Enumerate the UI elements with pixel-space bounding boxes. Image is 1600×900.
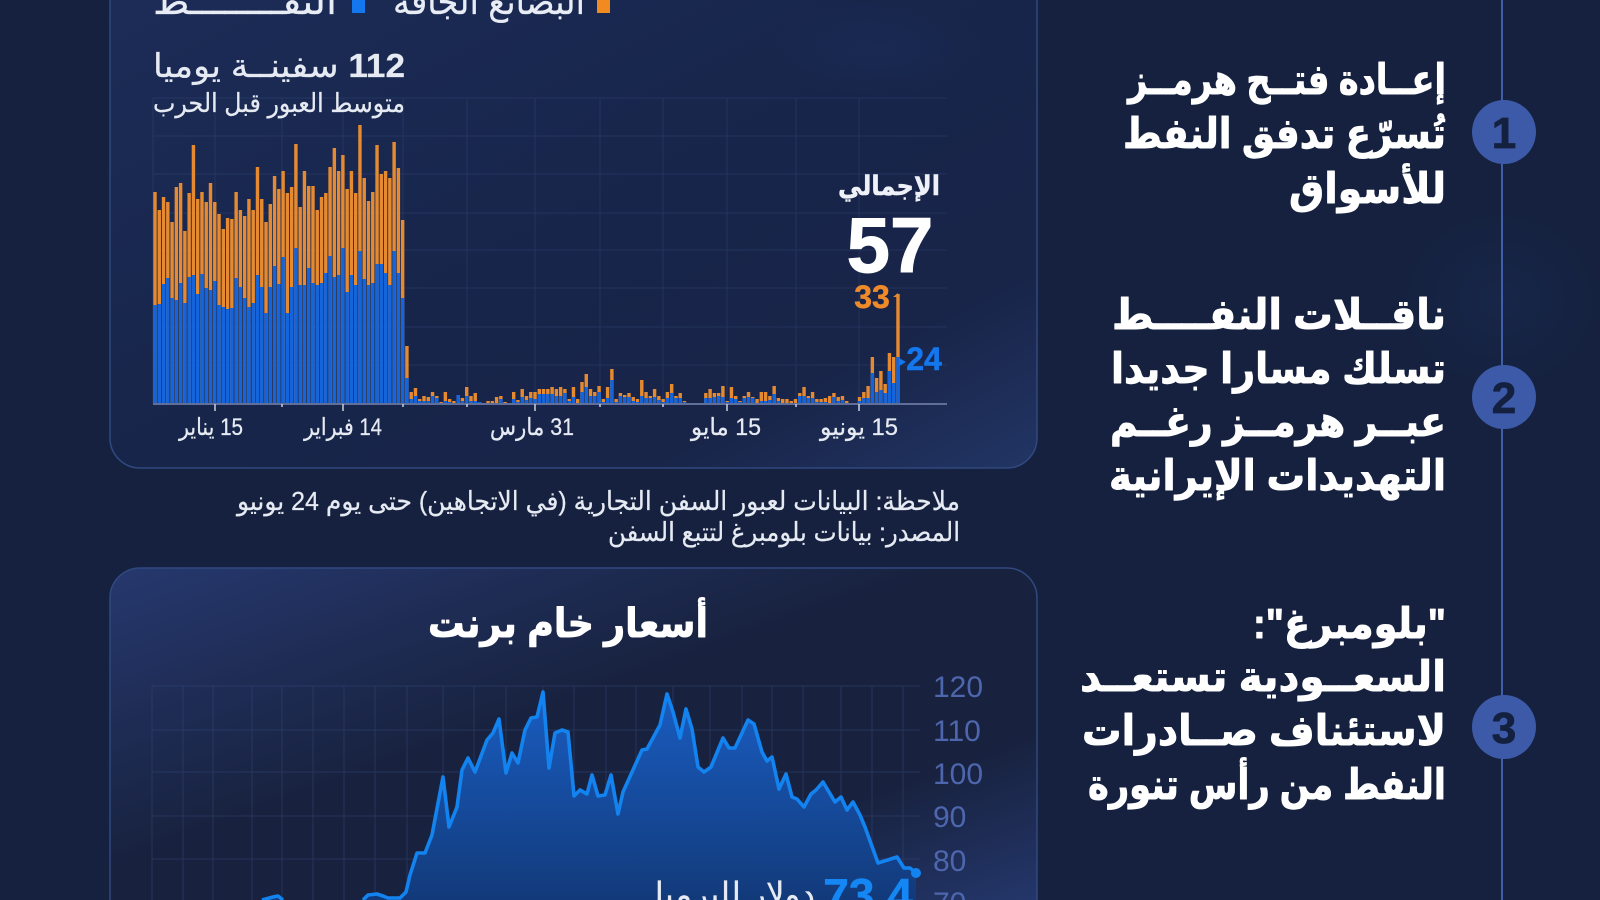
x-axis date labels: 15 يونيو — [819, 414, 898, 441]
pre-war average label: متوسط العبور قبل الحرب — [153, 88, 405, 119]
marker: blue arrow — [899, 358, 906, 366]
area chart: Brent price — [262, 692, 921, 900]
legend swatch: orange — [597, 0, 610, 13]
note and source — [235, 486, 960, 548]
headline 2: ناقــلات النفــــط — [1112, 291, 1446, 338]
headline 3: لاستئناف صــادرات — [1082, 707, 1446, 755]
total callout: 33 — [854, 279, 890, 315]
x-axis date labels: 14 فبراير — [303, 414, 382, 441]
number badge 1 — [1472, 100, 1536, 164]
x-axis date labels: 31 مارس — [490, 414, 574, 441]
headline 2 — [1109, 291, 1536, 501]
panel: ship transits chart — [110, 0, 1037, 468]
note and source: ملاحظة: البيانات لعبور السفن التجارية (في الاتجاهين) حتى يوم 24 يونيو — [235, 486, 960, 517]
y-axis scale: 120 — [933, 671, 983, 704]
legend swatch: blue — [352, 0, 365, 13]
stacked bar chart: daily transits — [153, 125, 947, 411]
pre-war average label: 112 سفينــة يوميا — [153, 47, 405, 85]
marker: orange tick — [893, 293, 898, 297]
y-axis scale: 80 — [933, 845, 966, 878]
total callout — [838, 171, 942, 377]
headline 3: النفط من رأس تنورة — [1088, 757, 1446, 810]
y-axis scale: 90 — [933, 801, 966, 834]
x-axis date labels: 15 مايو — [690, 414, 761, 441]
note and source: المصدر: بيانات بلومبرغ لتتبع السفن — [608, 517, 960, 548]
legend: cargo types — [153, 0, 610, 23]
headline 3 — [1080, 600, 1536, 810]
headline 2: التهديدات الإيرانية — [1109, 452, 1446, 501]
y-axis scale: 100 — [933, 758, 983, 791]
headline 1: للأسواق — [1289, 163, 1446, 214]
latest price label — [640, 869, 913, 900]
end point marker — [911, 868, 921, 878]
number badge 2: 2 — [1492, 374, 1516, 423]
x-axis date labels — [178, 414, 898, 441]
x-axis date labels: 15 يناير — [178, 414, 243, 441]
headline 2: تسلك مسارا جديدا — [1111, 345, 1446, 393]
number badge 1: 1 — [1492, 109, 1516, 158]
pre-war average label — [153, 47, 405, 119]
y-axis scale — [933, 671, 983, 900]
headline 2: عبــر هرمــز رغــم — [1110, 398, 1446, 447]
total callout: 57 — [847, 201, 933, 289]
headline 1 — [1123, 56, 1536, 214]
total callout: 24 — [906, 341, 942, 377]
number badge 2 — [1472, 365, 1536, 429]
headline 1: تُسرّع تدفق النفط — [1123, 110, 1446, 159]
number badge 3: 3 — [1492, 704, 1516, 753]
headline 3: "بلومبرغ": — [1253, 600, 1446, 649]
number badge 3 — [1472, 695, 1536, 759]
y-axis scale: 110 — [933, 715, 981, 748]
total callout: الإجمالي — [838, 171, 940, 202]
headline 1: إعــادة فتــح هرمــز — [1126, 56, 1446, 105]
chart title: أسعار خام برنت — [428, 597, 708, 647]
timeline axis — [1501, 0, 1503, 900]
headline 3: السعــودية تستعــد — [1080, 653, 1446, 702]
panel: Brent crude price chart — [110, 568, 1037, 900]
